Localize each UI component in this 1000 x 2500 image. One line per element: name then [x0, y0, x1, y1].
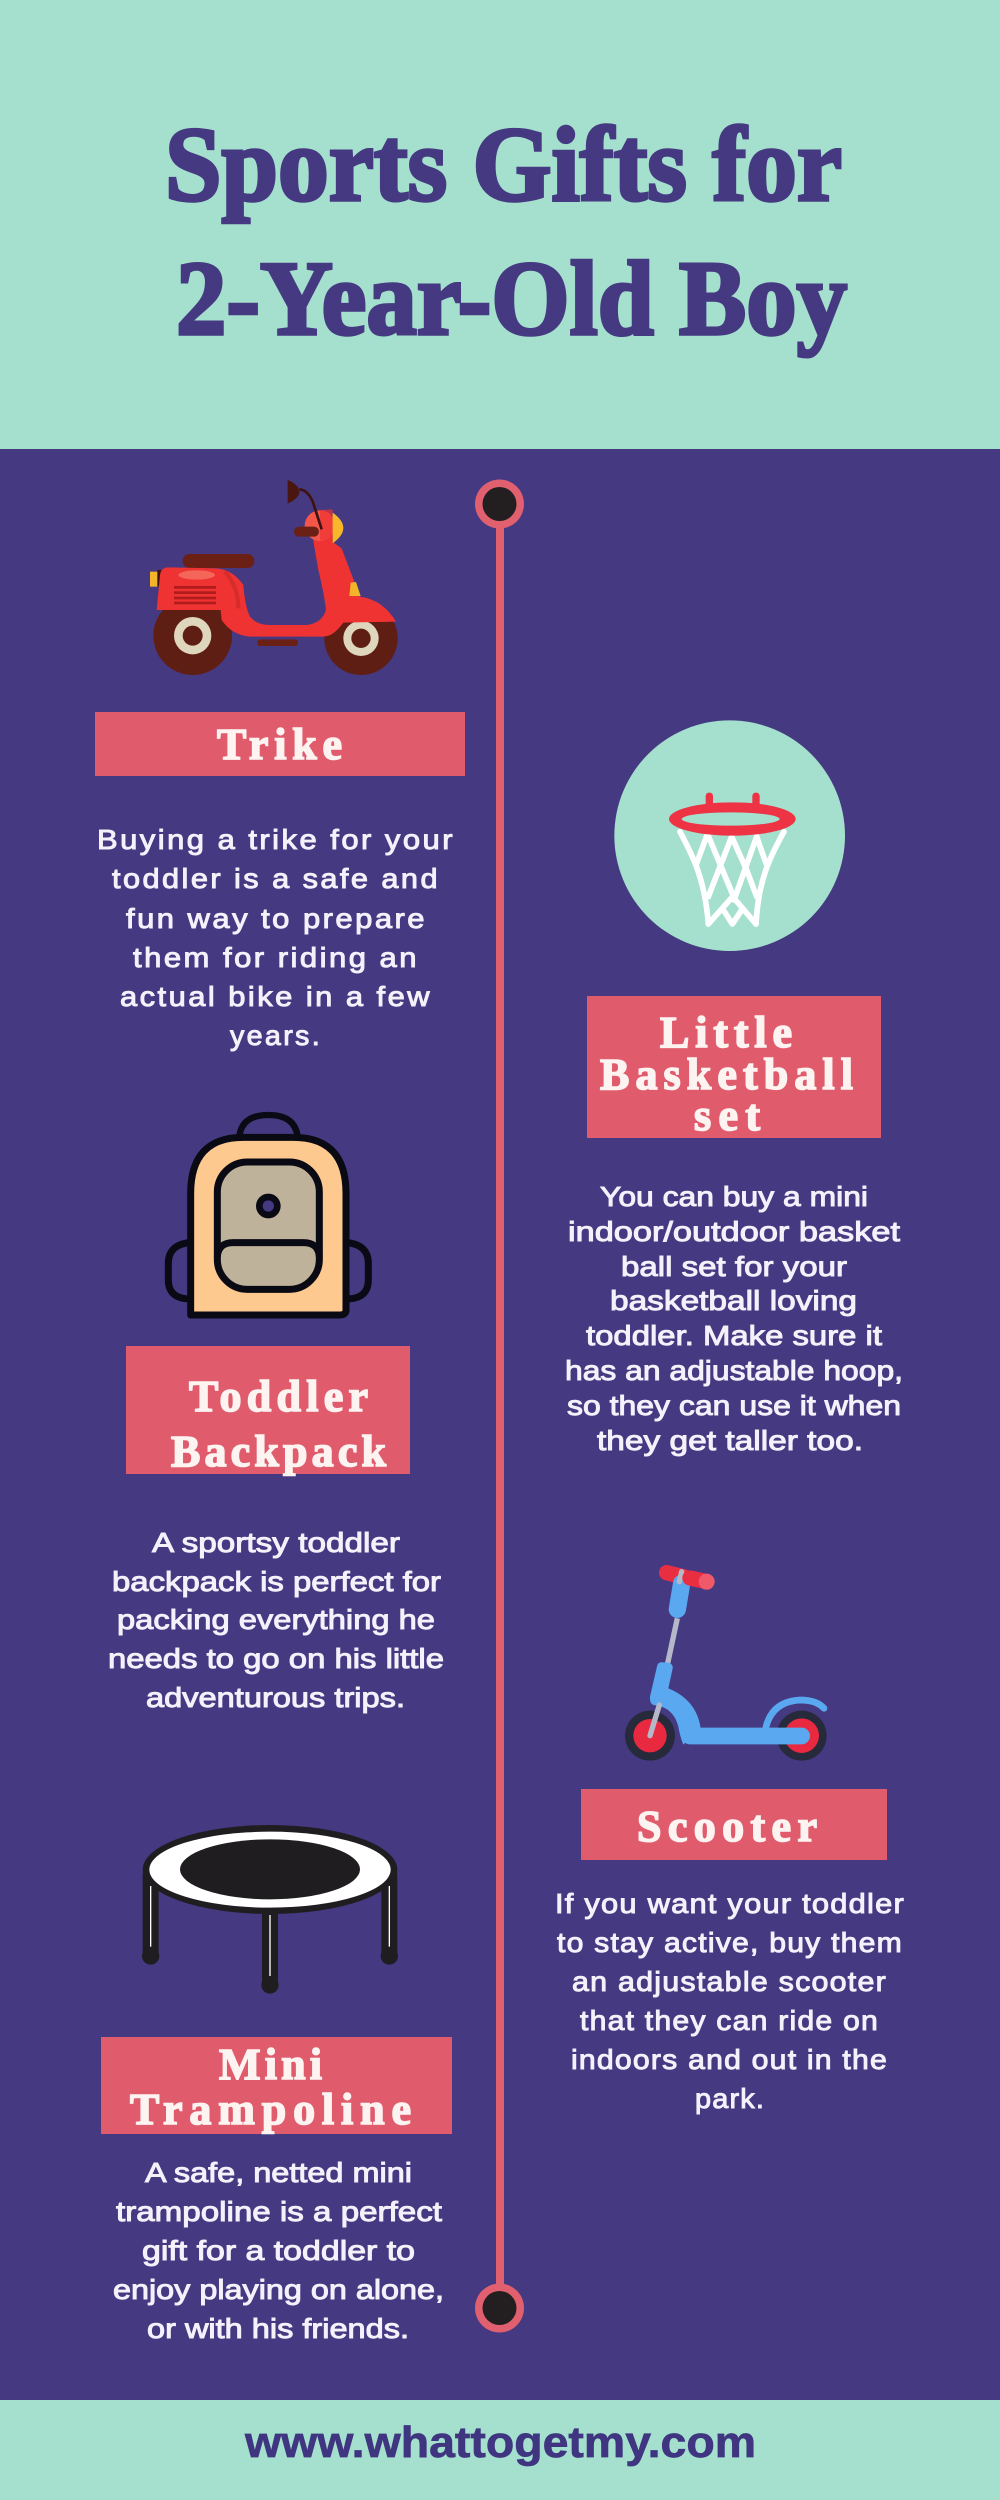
heading: Mini Trampoline: Mini: [219, 2040, 322, 2089]
heading: Little Basketball set: Basketball: [600, 1050, 853, 1099]
text block: backpack description: adventurous trips.: [146, 1682, 405, 1713]
text block: backpack description: packing everything he: [117, 1604, 435, 1635]
panel: Scooter: [555, 1789, 905, 2114]
text block: trampoline description: [113, 2157, 444, 2344]
text block: backpack description: needs to go on his little: [108, 1643, 444, 1674]
panel: footer background: [0, 2400, 1000, 2500]
panel: header background: [0, 0, 1000, 449]
text block: Trike description: them for riding an: [133, 942, 419, 973]
heading: Scooter: [581, 1789, 887, 1860]
text block: Trike description: years.: [230, 1020, 322, 1051]
heading: Mini Trampoline: [101, 2037, 452, 2134]
text block: trampoline description: gift for a toddler to: [142, 2235, 415, 2266]
text block: scooter description: an adjustable scooter: [572, 1966, 887, 1997]
text block: basketball description: so they can use it when: [567, 1390, 901, 1421]
text block: Trike description: Buying a trike for your: [97, 824, 455, 855]
panel: Little Basketball set: [565, 996, 903, 1456]
text block: scooter description: If you want your toddler: [555, 1888, 905, 1919]
heading: Trike: [95, 712, 465, 776]
heading: Trike: Trike: [217, 720, 342, 769]
icon: trampoline: [142, 1825, 398, 1994]
icon: red scooter (trike): [150, 480, 398, 675]
footer website text: www.whattogetmy.com: [244, 2418, 756, 2467]
text block: basketball description: toddler. Make sure it: [586, 1320, 882, 1351]
text block: backpack description: [108, 1527, 444, 1713]
heading: Toddler Backpack: Toddler: [189, 1372, 368, 1421]
text block: Trike description: actual bike in a few: [120, 981, 432, 1012]
heading: Mini Trampoline: Trampoline: [130, 2085, 411, 2134]
text block: scooter description: [555, 1888, 905, 2114]
icon: basketball hoop in circle: [614, 720, 845, 951]
text block: Trike description: [97, 824, 455, 1051]
heading: Little Basketball set: set: [694, 1091, 760, 1140]
panel: Mini Trampoline: [101, 2037, 452, 2344]
panel: Trike: [95, 712, 465, 1051]
text block: basketball description: basketball loving: [610, 1285, 857, 1316]
text block: trampoline description: or with his friends.: [147, 2313, 409, 2344]
text block: Trike description: toddler is a safe and: [112, 863, 440, 894]
text block: basketball description: indoor/outdoor basket: [568, 1216, 900, 1247]
title: [165, 106, 847, 357]
icon: blue kick scooter: [625, 1572, 827, 1761]
text block: scooter description: to stay active, buy them: [557, 1927, 903, 1958]
text block: backpack description: A sportsy toddler: [152, 1527, 400, 1558]
heading: Little Basketball set: [587, 996, 881, 1140]
text block: Trike description: fun way to prepare: [126, 903, 427, 934]
text block: trampoline description: enjoy playing on alone,: [113, 2274, 444, 2305]
text block: trampoline description: A safe, netted mini: [145, 2157, 412, 2188]
text block: basketball description: has an adjustable hoop,: [565, 1355, 903, 1386]
title: 2-Year-Old Boy: [176, 240, 847, 357]
text block: backpack description: backpack is perfect for: [112, 1566, 441, 1597]
heading: Little Basketball set: Little: [660, 1008, 792, 1057]
text block: basketball description: they get taller too.: [597, 1425, 863, 1456]
text block: scooter description: indoors and out in the: [571, 2044, 888, 2075]
panel: Toddler Backpack: [108, 1346, 444, 1713]
text block: trampoline description: trampoline is a perfect: [116, 2196, 442, 2227]
text block: basketball description: ball set for your: [621, 1251, 847, 1282]
text block: scooter description: park.: [695, 2083, 765, 2114]
text block: basketball description: [565, 1181, 903, 1456]
panel: main background: [0, 449, 1000, 2400]
heading: Toddler Backpack: [126, 1346, 410, 1476]
heading: Scooter: Scooter: [637, 1802, 817, 1851]
text block: basketball description: You can buy a mini: [600, 1181, 868, 1212]
text block: scooter description: that they can ride on: [580, 2005, 879, 2036]
icon: backpack: [168, 1115, 368, 1315]
timeline line with end dots: [475, 480, 524, 2332]
heading: Toddler Backpack: Backpack: [171, 1427, 387, 1476]
title: Sports Gifts for: [165, 106, 842, 223]
